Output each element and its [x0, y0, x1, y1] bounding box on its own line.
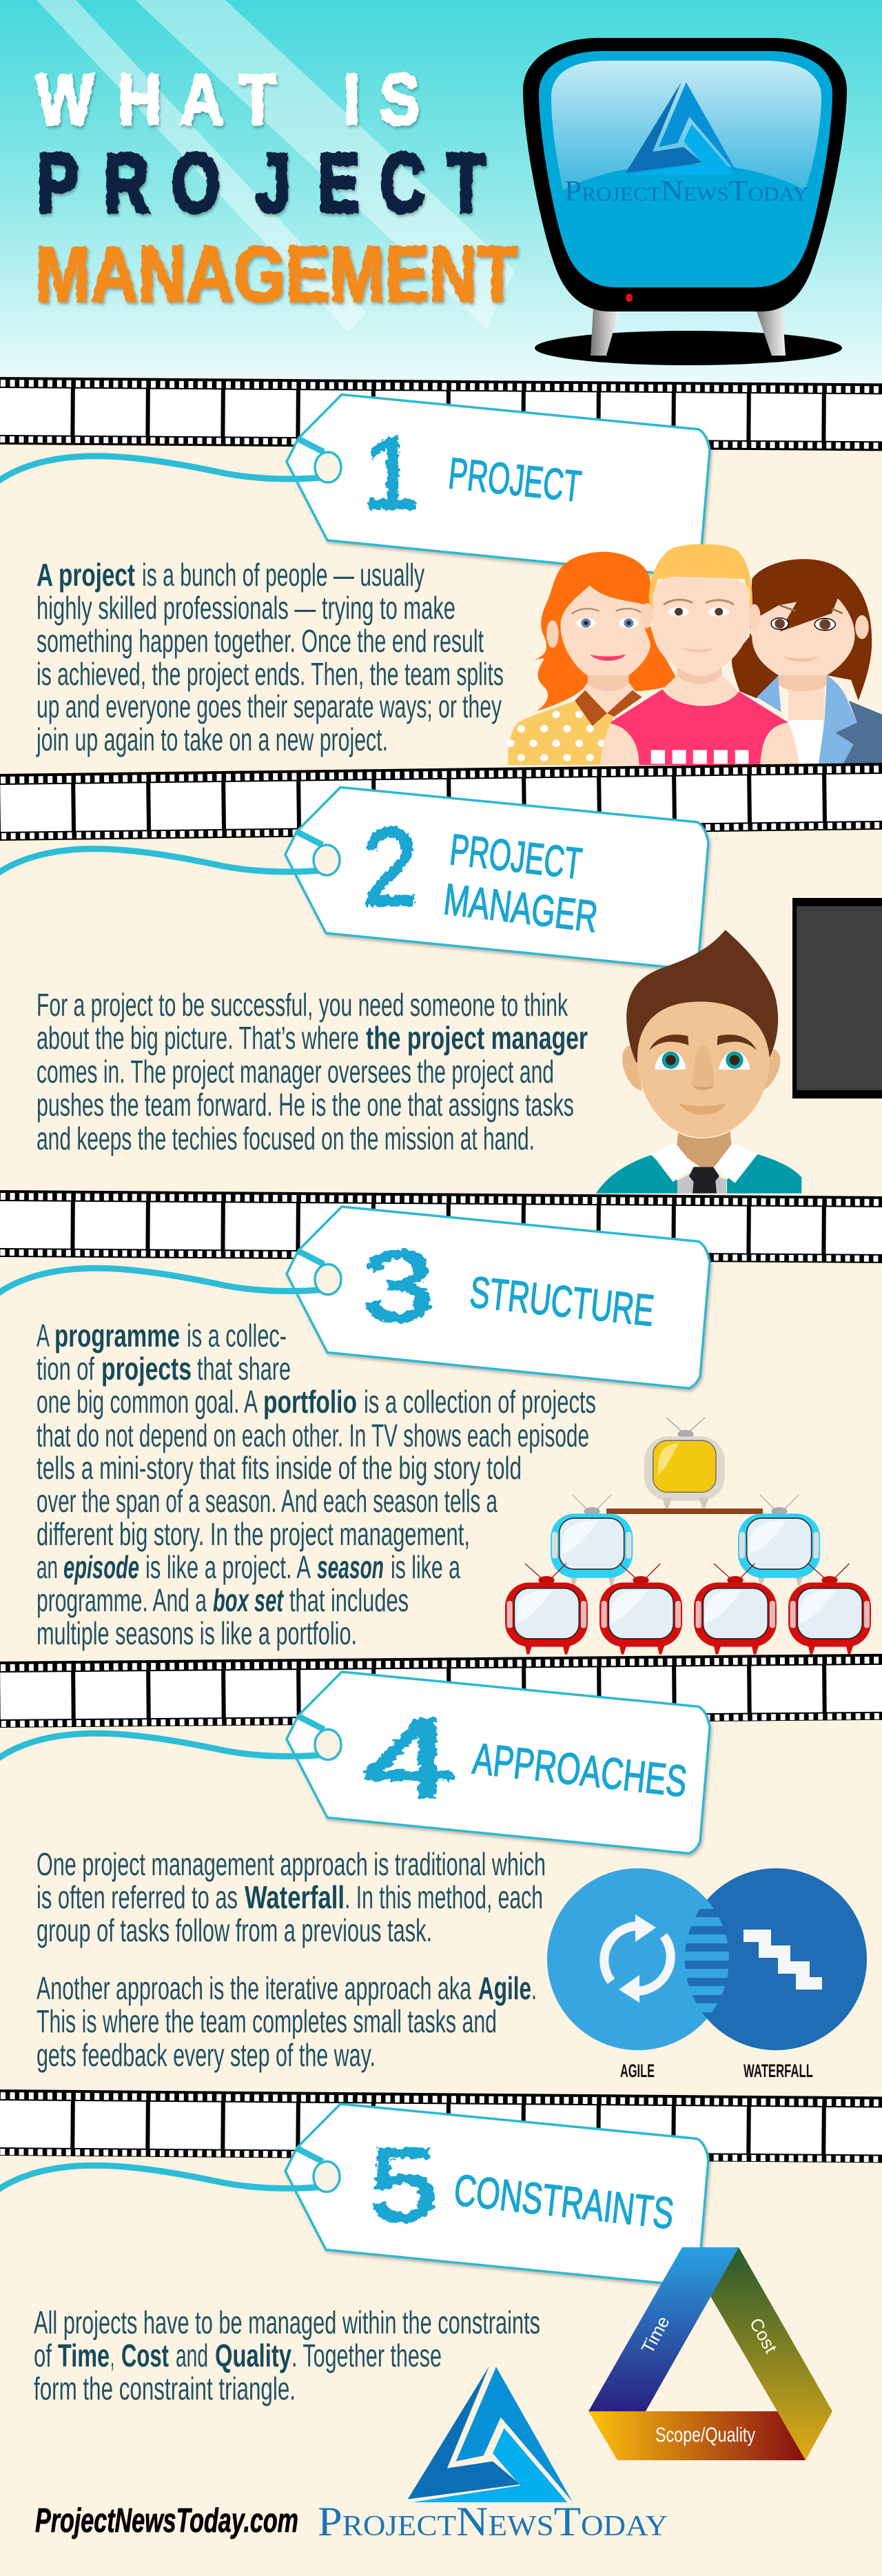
header background [0, 0, 882, 386]
tag 2 [0, 787, 708, 969]
icon: television with logo [523, 38, 847, 365]
red television 1 [505, 1564, 588, 1655]
text: section 5: Cost [121, 2338, 169, 2373]
text: section 1: highly skilled professionals — trying to make [37, 590, 455, 626]
title [35, 60, 517, 318]
label: agile: AGILE [620, 2061, 655, 2081]
blond man [600, 544, 799, 765]
blue television right [738, 1495, 820, 1586]
text: section 4 [37, 1846, 546, 2073]
text: section 4: One project management approach is traditional which [37, 1846, 546, 1882]
tag 1 number: 1 [362, 416, 419, 530]
label: scope/quality: Scope/Quality [655, 2424, 755, 2446]
heading: constraints: CONSTRAINTS [451, 2165, 676, 2238]
icon: stairs [743, 1930, 822, 1990]
text: section 3: multiple seasons is like a portfolio. [37, 1615, 357, 1651]
text: section 3: over the span of a season. And each season tells a [37, 1483, 498, 1519]
film strip 2 [0, 763, 882, 841]
tag 1 [0, 394, 710, 576]
text: section 5 [34, 2304, 540, 2406]
text: section 2: For a project to be successful, you need someone to think [37, 987, 568, 1023]
red television 2 [599, 1564, 682, 1655]
heading: project manager: MANAGER [441, 874, 600, 941]
text: section 2: and keeps the techies focused on the mission at hand. [37, 1121, 535, 1156]
text: section 3: portfolio [263, 1384, 357, 1420]
text: section 4: Another approach is the iterative approach aka [37, 1970, 471, 2006]
heading: approaches: APPROACHES [470, 1733, 689, 1806]
red haired woman [507, 552, 677, 765]
red television 3 [694, 1564, 777, 1655]
text: section 3: an [37, 1549, 58, 1585]
text: section 1: A project [37, 557, 135, 593]
text: section 4: Agile [478, 1970, 531, 2006]
text: section 3: that includes [289, 1582, 409, 1618]
illustration: hierarchy of televisions [505, 1418, 871, 1655]
logo mark [408, 2366, 573, 2502]
text: section 4: is often referred to as [37, 1879, 238, 1915]
text: section 4: gets feedback every step of the way. [37, 2037, 376, 2073]
diagram: constraint triangle [588, 2247, 832, 2460]
text: section 3: season [317, 1549, 384, 1585]
text: section 3: is like a project. A [145, 1549, 311, 1585]
blue television left [551, 1495, 633, 1586]
text: section 3: is a collection of projects [364, 1384, 596, 1420]
tag 5 [0, 2104, 708, 2285]
text: section 5: of [34, 2338, 52, 2373]
text: section 5: All projects have to be managed within the constraints [34, 2304, 540, 2340]
tag 3 [0, 1207, 710, 1388]
text: section 3: A [37, 1318, 50, 1353]
text: section 5: form the constraint triangle. [34, 2371, 296, 2406]
label: waterfall: WATERFALL [743, 2061, 813, 2081]
text: section 1: something happen together. Once the end result [37, 623, 484, 659]
text: section 3: tells a mini-story that fits inside of the big story told [37, 1450, 522, 1486]
title: PROJECT [37, 136, 485, 229]
text: section 4: This is where the team completes small tasks and [37, 2003, 497, 2039]
title: WHAT IS [37, 60, 420, 140]
red television 4 [788, 1564, 871, 1655]
text: section 3: projects [101, 1351, 192, 1387]
text: section 4: Waterfall [245, 1879, 345, 1915]
text: section 1: is a bunch of people — usually [142, 557, 424, 593]
text: section 1: is achieved, the project ends. Then, the team splits [37, 656, 504, 692]
text: section 3: programme [54, 1318, 180, 1353]
yellow television [644, 1418, 725, 1509]
text: section 4: . In this method, each [345, 1879, 543, 1915]
text: section 3: one big common goal. A [37, 1384, 258, 1420]
tag 2 number: 2 [362, 806, 418, 929]
text: section 5: and [176, 2338, 208, 2373]
title: MANAGEMENT [35, 231, 517, 318]
film strip 5 [0, 2089, 882, 2163]
text: section 2 [37, 987, 588, 1156]
text: section 5: . Together these [291, 2338, 442, 2373]
heading: project: PROJECT [447, 448, 584, 511]
text: section 1 [36, 557, 504, 757]
diagram: agile and waterfall circles [547, 1868, 867, 2081]
text: section 2: about the big picture. That’s where [37, 1020, 359, 1056]
text: section 3: episode [63, 1549, 139, 1585]
tag 3 number: 3 [362, 1230, 434, 1342]
text: section 5: , [110, 2338, 114, 2373]
text: section 1: join up again to take on a new project. [36, 722, 388, 757]
website address: ProjectNewsToday.com [35, 2502, 298, 2539]
text: section 3: is a collec- [187, 1318, 287, 1353]
text: section 3: that do not depend on each other. In TV shows each episode [37, 1418, 589, 1453]
tag 4 number: 4 [363, 1695, 455, 1821]
text: section 3: different big story. In the project management, [37, 1516, 470, 1552]
illustration: project manager [596, 930, 801, 1194]
text: section 1: up and everyone goes their separate ways; or they [37, 688, 502, 724]
text: section 3: that share [197, 1351, 291, 1387]
text: section 4: . [531, 1970, 537, 2006]
label: cost: Cost [746, 2314, 781, 2357]
text: section 3: box set [213, 1582, 284, 1618]
logo wordmark: ProjectNewsToday [318, 2499, 668, 2544]
heading: project manager [441, 824, 600, 941]
dark panel at right edge [792, 898, 882, 1098]
brown haired woman [732, 559, 882, 765]
tag 5 number: 5 [369, 2127, 438, 2243]
label: time: Time [637, 2313, 674, 2357]
text: section 2: comes in. The project manager oversees the project and [37, 1054, 554, 1090]
text: section 3: programme. And a [37, 1582, 207, 1618]
tag 4 [0, 1672, 710, 1854]
icon: television with logo: ProjectNewsToday [564, 176, 808, 207]
text: section 5: Time [58, 2338, 110, 2373]
heading: structure: STRUCTURE [468, 1267, 657, 1336]
heading: project manager: PROJECT [447, 824, 584, 888]
illustration: project team [507, 544, 882, 765]
text: section 4: group of tasks follow from a previous task. [37, 1912, 432, 1948]
text: section 3: tion of [37, 1351, 94, 1387]
text: section 5: Quality [215, 2338, 291, 2373]
text: section 2: the project manager [366, 1020, 588, 1056]
film strip 1 [0, 377, 882, 451]
connector bar [606, 1509, 763, 1514]
film strip 4 [0, 1654, 882, 1728]
icon: circular arrows [604, 1914, 670, 2003]
film strip 3 [0, 1190, 882, 1263]
text: section 3 [37, 1318, 596, 1651]
text: section 3: is like a [391, 1549, 460, 1585]
text: section 2: pushes the team forward. He is the one that assigns tasks [37, 1087, 574, 1123]
